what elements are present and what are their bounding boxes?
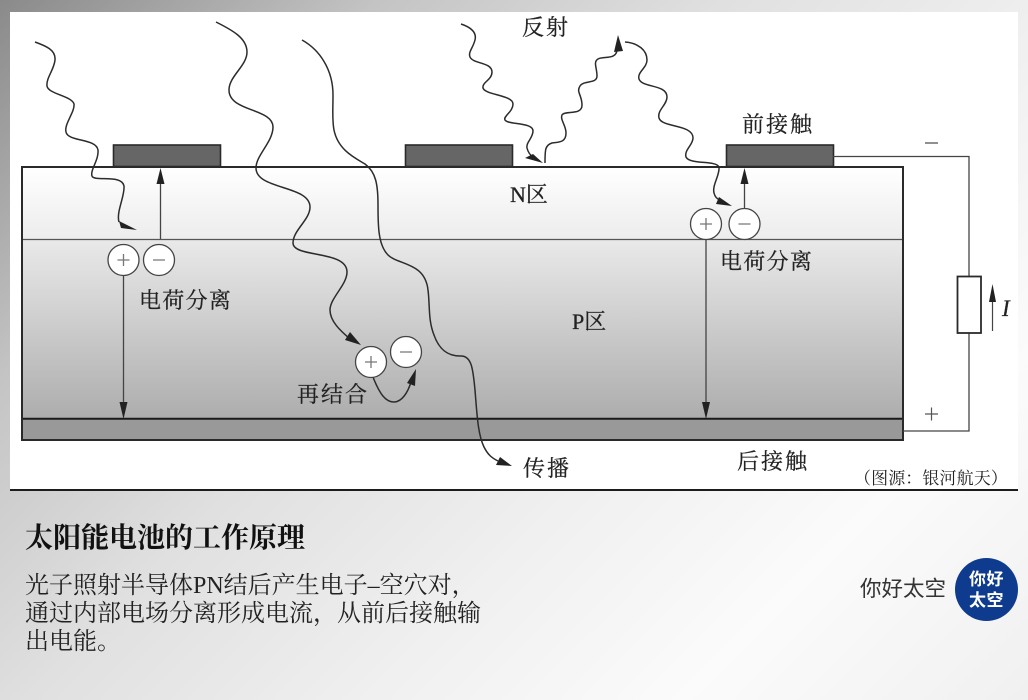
wave: reflected upward (545, 35, 623, 163)
label: charge separation left: 电荷分离 (139, 288, 232, 313)
P region (22, 240, 903, 419)
external circuit with load resistor (833, 156, 981, 431)
carrier pair recombining (356, 336, 422, 378)
title: 太阳能电池的工作原理 (25, 523, 305, 554)
recombination arrow (373, 369, 416, 402)
wave: absorbed left (35, 42, 137, 230)
label: charge separation right: 电荷分离 (720, 249, 813, 274)
description text: 通过内部电场分离形成电流，从前后接触输 (25, 601, 481, 627)
wave: incoming reflected (461, 24, 543, 163)
label: P region: P区 (572, 309, 606, 334)
solar cell body (22, 167, 903, 440)
carrier pair right (690, 208, 760, 240)
wave: absorbed right (625, 42, 732, 206)
label: N region: N区 (510, 182, 548, 207)
icon: brand logo (955, 558, 1018, 621)
description text: 出电能。 (25, 629, 121, 655)
carrier pair left (108, 244, 174, 276)
label: current: I (1001, 296, 1011, 321)
divider rule (10, 489, 1018, 491)
brand name: 你好太空 (860, 577, 946, 601)
N region (22, 167, 903, 240)
panel: diagram background (10, 12, 1018, 490)
description text: 光子照射半导体PN结后产生电子–空穴对， (25, 573, 476, 599)
polarity plus (925, 408, 938, 420)
wave: recombination (216, 22, 361, 345)
label: front contact: 前接触 (742, 112, 814, 137)
description text (25, 572, 481, 655)
label: reflection: 反射 (522, 15, 570, 40)
label: back contact: 后接触 (737, 449, 809, 474)
icon: brand logo: 你好 (969, 570, 1004, 589)
label: recombination: 再结合 (297, 382, 369, 407)
front contacts (114, 145, 834, 166)
icon: brand logo: 太空 (969, 591, 1004, 610)
current arrow (989, 284, 996, 331)
source credit: （图源：银河航天） (854, 469, 1008, 488)
arrows: charge carriers to contacts (120, 168, 748, 419)
label: transmission: 传播 (523, 456, 571, 481)
back contact (22, 419, 903, 440)
wave: transmitted (302, 40, 512, 466)
polarity minus (925, 142, 938, 144)
